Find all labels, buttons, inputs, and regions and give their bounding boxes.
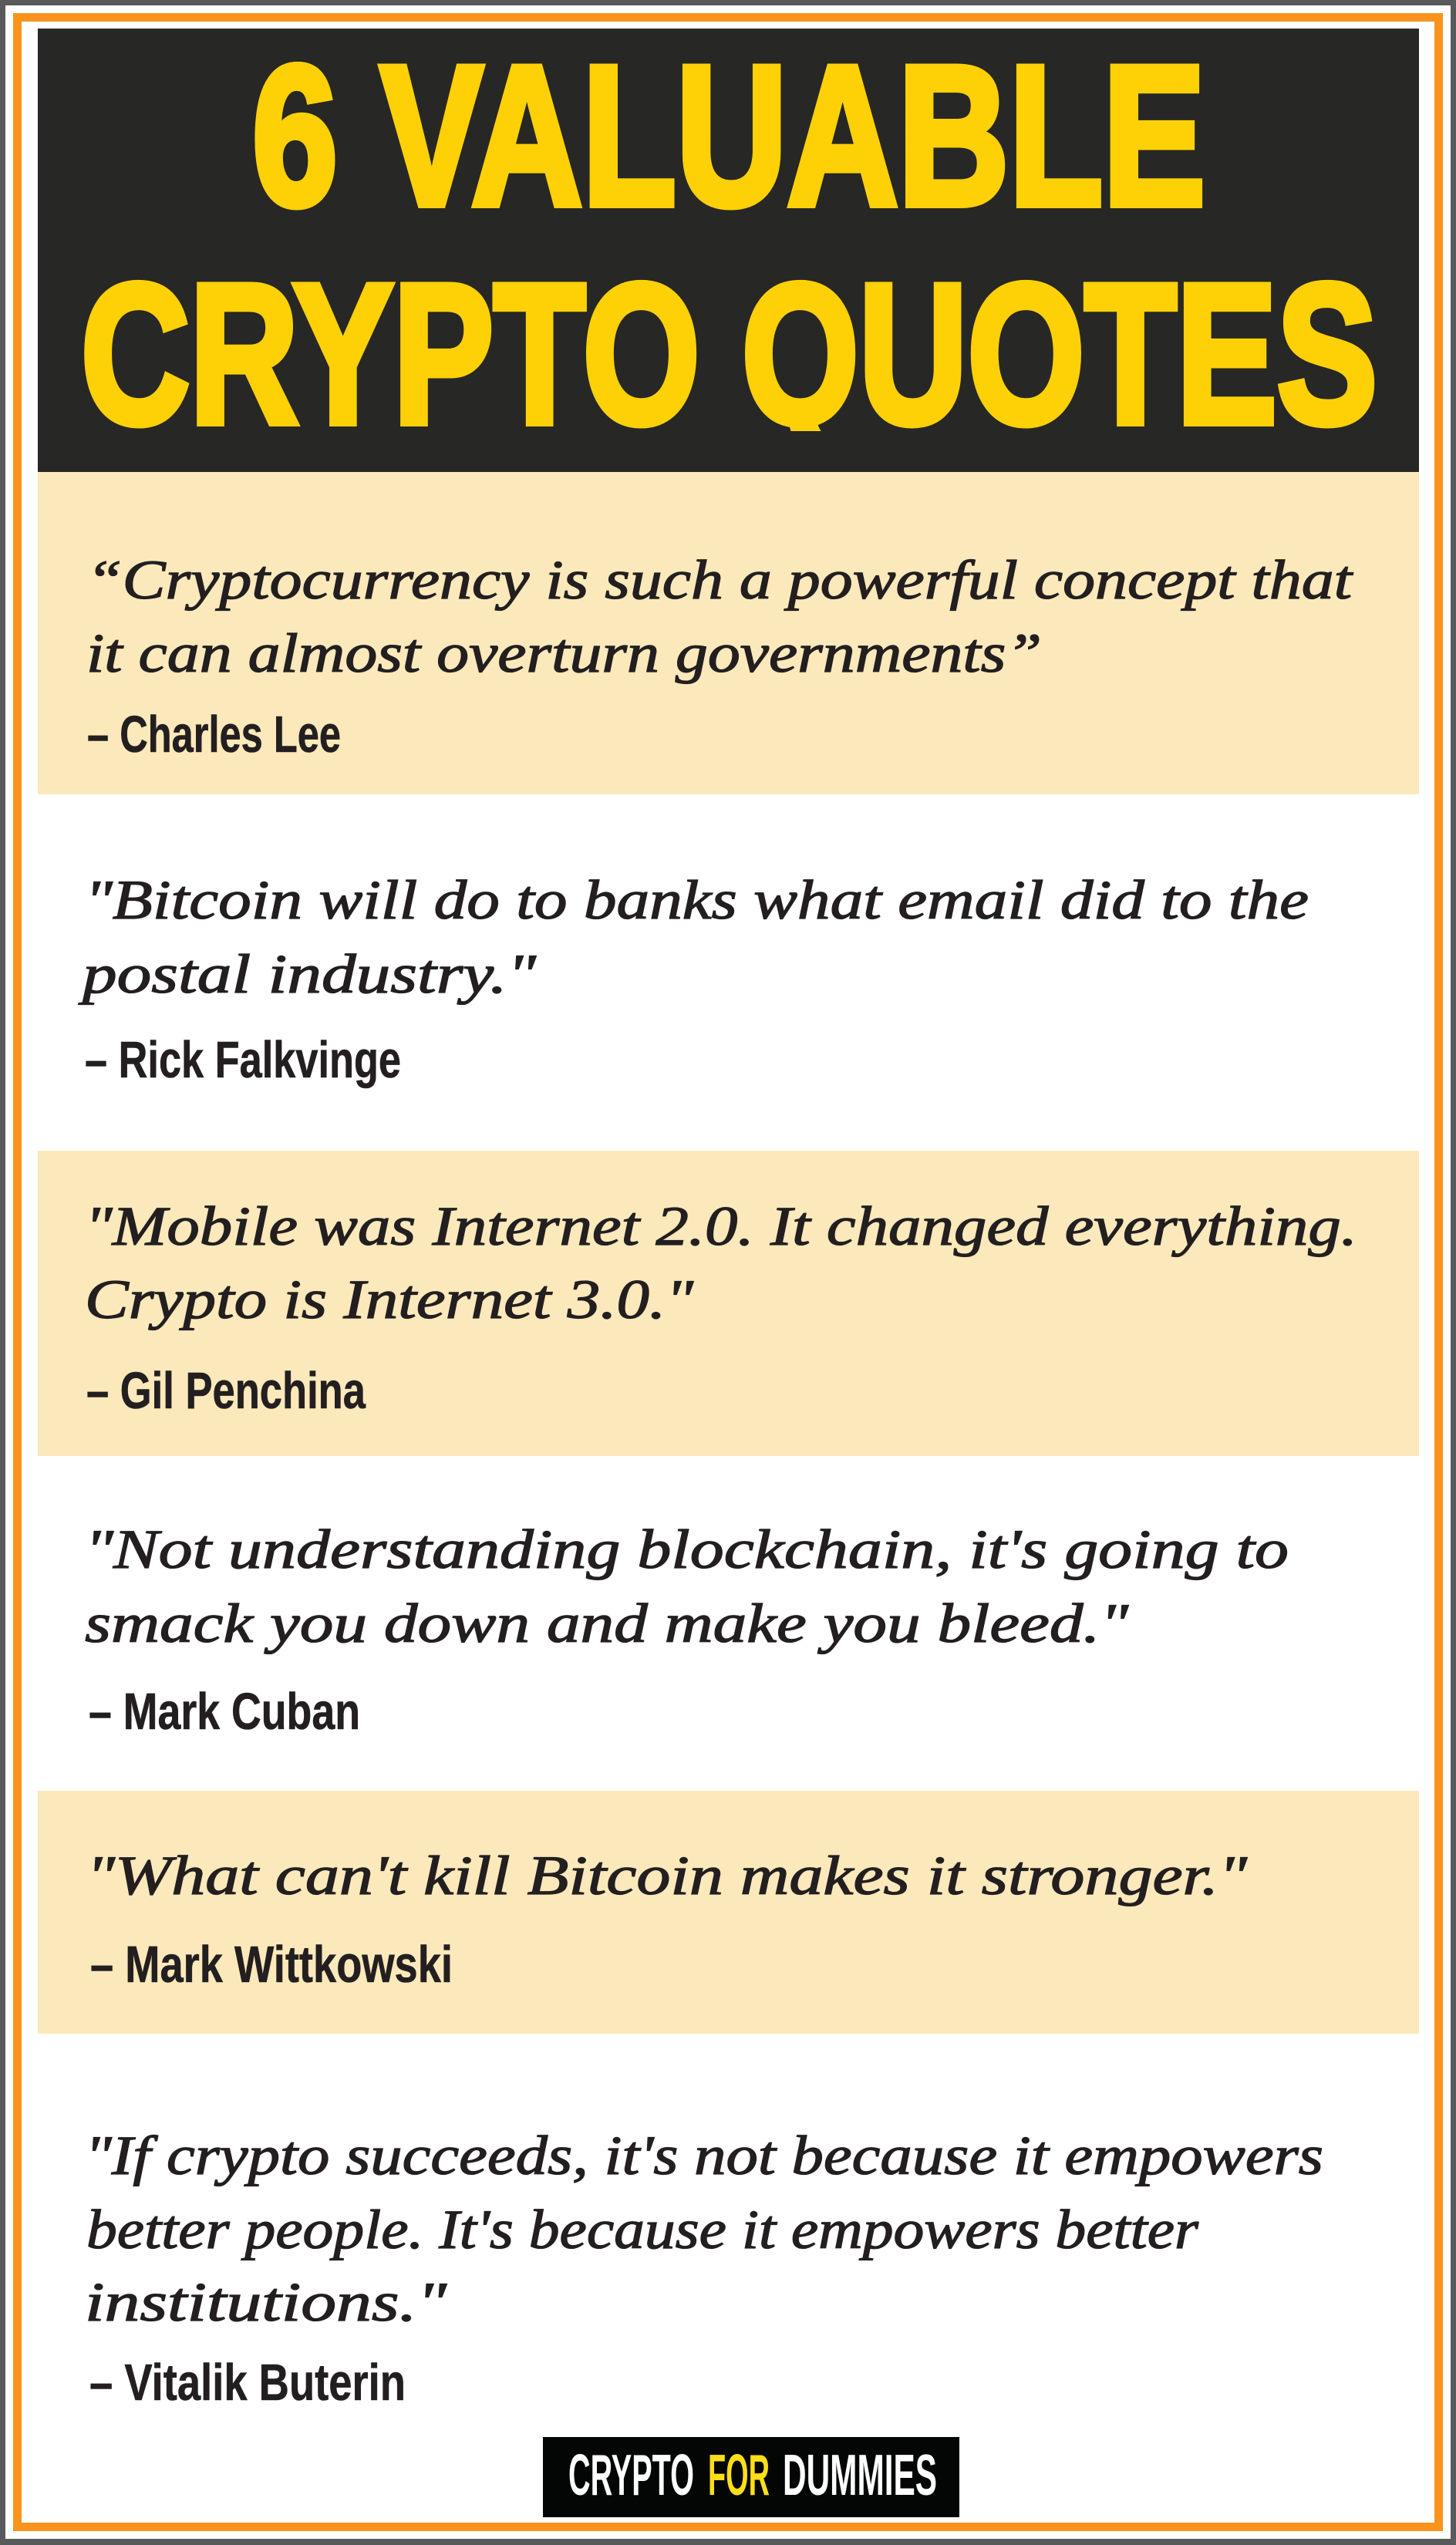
quote text — [85, 1195, 1357, 1330]
quote text: it can almost overturn governments” — [86, 622, 1042, 684]
quote text — [86, 549, 1353, 684]
panel: Charles Lee quote — [38, 472, 1419, 794]
quote text: “Cryptocurrency is such a powerful concept that — [86, 549, 1353, 611]
quote text: Crypto is Internet 3.0." — [85, 1269, 694, 1330]
quote text: "Bitcoin will do to banks what email did to the — [85, 869, 1309, 931]
panel: Mark Wittkowski quote — [38, 1791, 1419, 2034]
quote text: "Mobile was Internet 2.0. It changed everything. — [85, 1195, 1357, 1257]
logo: Crypto For Dummies: FOR — [708, 2442, 770, 2507]
author: – Vitalik Buterin — [89, 2354, 406, 2412]
title banner — [38, 24, 1419, 472]
author: – Rick Falkvinge — [85, 1031, 401, 1089]
quote text: postal industry." — [78, 943, 537, 1005]
quote text: "Not understanding blockchain, it's going to — [85, 1519, 1289, 1580]
quote text — [85, 1519, 1289, 1654]
title line 1: 6 VALUABLE — [252, 24, 1205, 247]
quote text — [85, 2125, 1323, 2333]
logo: Crypto For Dummies: CRYPTO — [568, 2442, 694, 2507]
quote text: smack you down and make you bleed." — [85, 1593, 1129, 1654]
author: – Charles Lee — [87, 706, 341, 764]
author: – Gil Penchina — [86, 1362, 366, 1420]
quote text: "If crypto succeeds, it's not because it empowers — [85, 2125, 1323, 2186]
quote text: "What can't kill Bitcoin makes it stronger." — [86, 1845, 1248, 1906]
author: – Mark Cuban — [89, 1683, 360, 1741]
panel: Mark Cuban quote — [85, 1519, 1289, 1741]
logo: Crypto For Dummies: DUMMIES — [783, 2442, 937, 2507]
quote text: institutions." — [85, 2271, 447, 2333]
panel: Vitalik Buterin quote — [85, 2125, 1323, 2412]
author: – Mark Wittkowski — [90, 1936, 453, 1994]
panel: Rick Falkvinge quote — [78, 869, 1309, 1089]
quote text: better people. It's because it empowers better — [86, 2199, 1199, 2260]
logo: Crypto For Dummies — [543, 2437, 959, 2517]
quote text — [78, 869, 1309, 1005]
panel: Gil Penchina quote — [38, 1151, 1419, 1456]
